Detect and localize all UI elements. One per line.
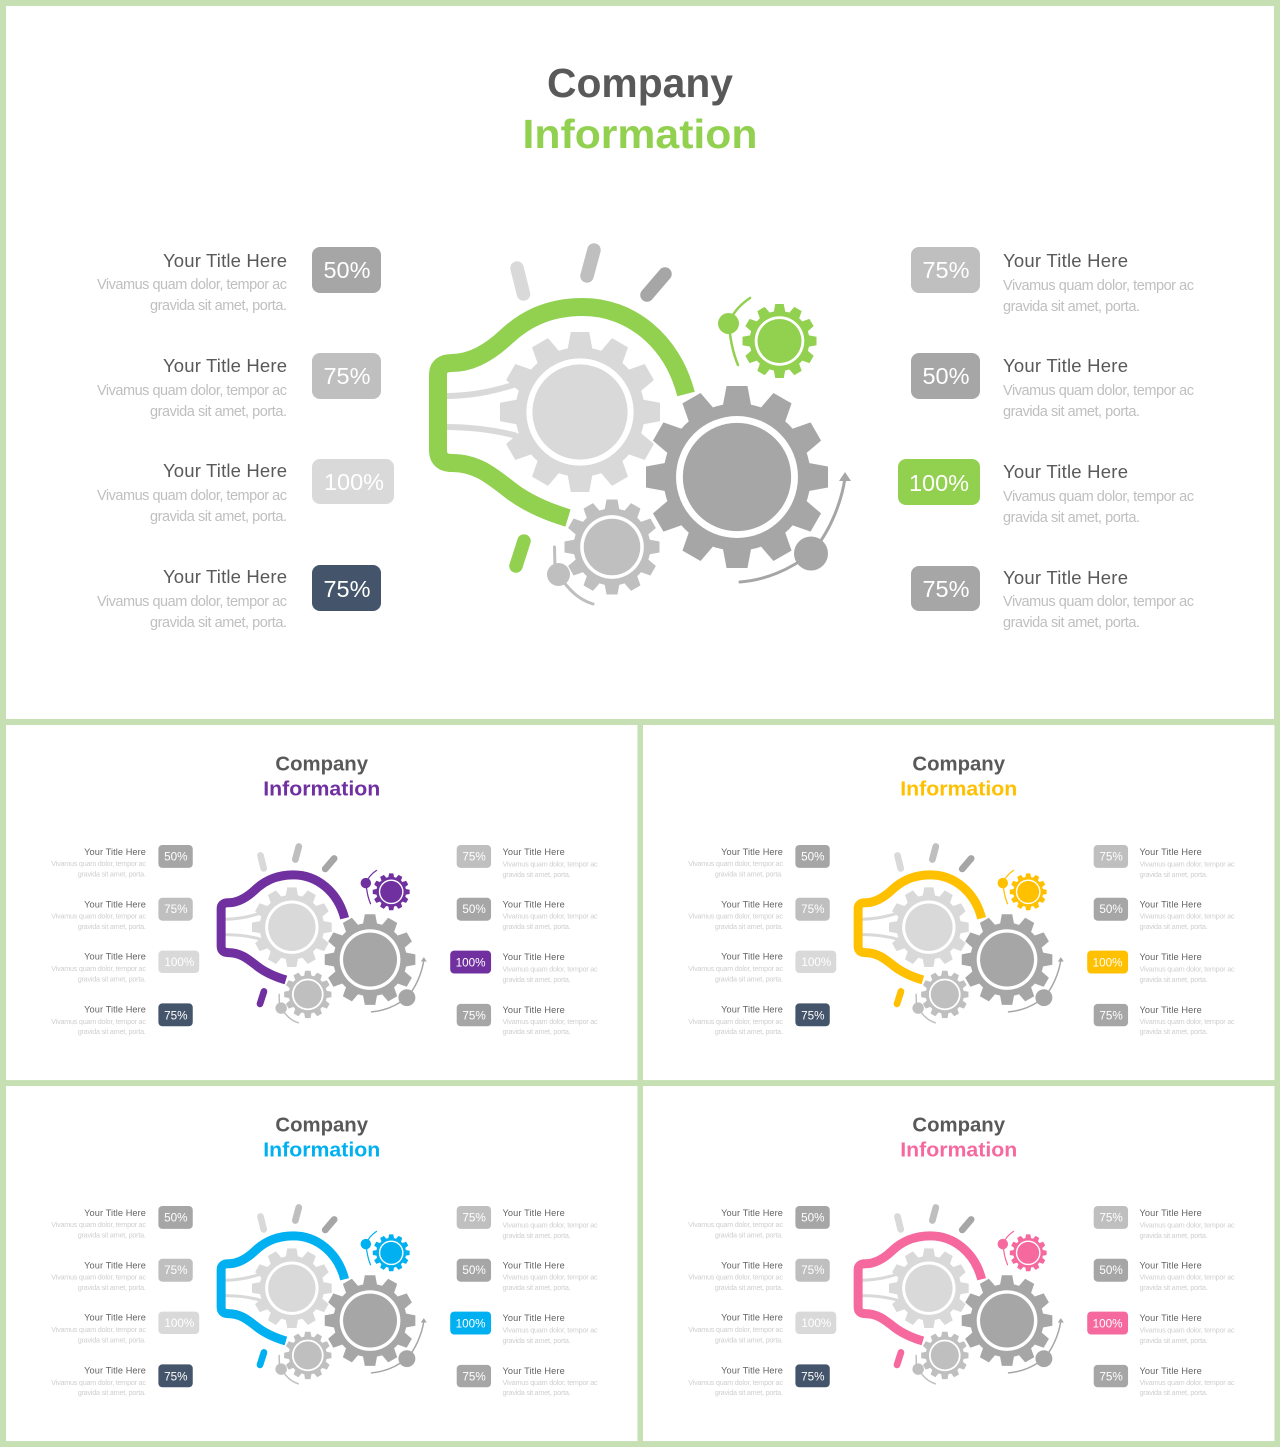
right item 3: 100% [1093, 1318, 1123, 1331]
right item 4: Vivamus quam dolor, tempor ac [503, 1017, 598, 1026]
right item 3: Your Title Here [1140, 952, 1202, 962]
left item 3: gravida sit amet, porta. [78, 1335, 146, 1344]
right item 4: gravida sit amet, porta. [1140, 1388, 1208, 1397]
icon: bulb outline [438, 307, 686, 518]
icon: accent knob [718, 298, 750, 365]
left item 4: gravida sit amet, porta. [78, 1388, 146, 1397]
left item 2: gravida sit amet, porta. [78, 1283, 146, 1292]
right item 3 [450, 1312, 598, 1345]
left item 2: Your Title Here [84, 1260, 146, 1270]
left item 3: Vivamus quam dolor, tempor ac [51, 964, 146, 973]
left item 4 [97, 565, 381, 631]
right item 3: 100% [456, 1318, 486, 1331]
right item 2: Your Title Here [1140, 899, 1202, 909]
right item 1: Vivamus quam dolor, tempor ac [503, 1220, 598, 1229]
left item 1 [51, 1206, 193, 1239]
icon: accent gear [1010, 1234, 1047, 1271]
icon: large gear [962, 914, 1052, 1005]
left item 3: Your Title Here [163, 460, 287, 481]
left item 4: Your Title Here [84, 1365, 146, 1375]
right item 1: gravida sit amet, porta. [503, 1231, 571, 1240]
left item 1: Vivamus quam dolor, tempor ac [51, 1220, 146, 1229]
icon: gray arrow with knob [372, 957, 427, 1012]
right item 2 [1094, 898, 1235, 931]
left item 3: gravida sit amet, porta. [78, 974, 146, 983]
right item 2: gravida sit amet, porta. [1003, 404, 1140, 420]
left item 2: Vivamus quam dolor, tempor ac [688, 912, 783, 921]
title: Information [263, 779, 380, 801]
icon: filament lines [862, 1274, 897, 1300]
right item 1 [1094, 845, 1235, 879]
right item 3: Your Title Here [503, 1313, 565, 1323]
icon: small gear [284, 1332, 331, 1379]
left item 4: Vivamus quam dolor, tempor ac [688, 1017, 783, 1026]
left item 1: Your Title Here [721, 847, 783, 857]
icon: accent gear [373, 1234, 410, 1271]
left item 4: gravida sit amet, porta. [150, 615, 287, 631]
icon: small gear [564, 500, 660, 594]
left item 3 [97, 459, 394, 525]
left item 3: Your Title Here [721, 952, 783, 962]
right item 3: 100% [1093, 957, 1123, 970]
left item 3: gravida sit amet, porta. [715, 974, 783, 983]
right item 1: Vivamus quam dolor, tempor ac [1003, 278, 1194, 294]
left item 4: Your Title Here [163, 566, 287, 587]
icon: rays [897, 847, 971, 1004]
right item 3: Your Title Here [503, 952, 565, 962]
left item 4 [51, 1003, 193, 1036]
panel: main green slide [6, 6, 1274, 719]
right item 3: gravida sit amet, porta. [1140, 1336, 1208, 1345]
right item 1 [1094, 1206, 1235, 1240]
right item 2: 50% [1099, 1264, 1123, 1277]
icon: bulb outline [221, 1236, 345, 1341]
right item 3 [1087, 951, 1235, 984]
right item 1 [911, 247, 1194, 315]
icon: filament lines [225, 1274, 260, 1300]
icon: gray arrow with knob [372, 1318, 427, 1373]
left item 1: 50% [323, 257, 371, 283]
right item 1: 75% [1099, 1211, 1123, 1224]
left item 3: 100% [164, 956, 194, 969]
left item 3: 100% [801, 956, 831, 969]
left item 1: Your Title Here [84, 1208, 146, 1218]
right item 2: Your Title Here [503, 899, 565, 909]
icon: accent knob [998, 870, 1014, 904]
left item 2: 75% [164, 1264, 188, 1277]
title: Company [912, 753, 1006, 775]
right item 3: Your Title Here [1140, 1313, 1202, 1323]
right item 3: Your Title Here [1003, 461, 1128, 482]
title [900, 1114, 1017, 1162]
right item 2: gravida sit amet, porta. [1140, 1283, 1208, 1292]
icon: rays [516, 250, 665, 566]
icon: filament lines [862, 913, 897, 939]
right item 4: gravida sit amet, porta. [503, 1027, 571, 1036]
icon: filament lines [445, 384, 517, 436]
left item 3: 100% [324, 469, 384, 495]
right item 3: 100% [456, 957, 486, 970]
right item 3: Vivamus quam dolor, tempor ac [1140, 965, 1235, 974]
left item 3: Vivamus quam dolor, tempor ac [97, 488, 287, 504]
left item 4 [688, 1364, 830, 1397]
icon: light gear [889, 1248, 969, 1328]
title: Company [547, 60, 733, 106]
right item 4: Vivamus quam dolor, tempor ac [1140, 1378, 1235, 1387]
icon: bulb outline [858, 875, 982, 980]
right item 2: Your Title Here [1140, 1260, 1202, 1270]
right item 1: 75% [462, 850, 486, 863]
left item 1: gravida sit amet, porta. [78, 869, 146, 878]
icon: filament lines [225, 913, 260, 939]
left item 2 [97, 353, 381, 420]
right item 4: Your Title Here [1140, 1366, 1202, 1376]
left item 4: Vivamus quam dolor, tempor ac [51, 1017, 146, 1026]
icon: small knob [912, 994, 935, 1023]
left item 2: 75% [323, 363, 371, 389]
right item 4: gravida sit amet, porta. [503, 1388, 571, 1397]
left item 2 [688, 898, 830, 931]
left item 2: Your Title Here [721, 899, 783, 909]
light bulb with gears illustration [438, 250, 851, 604]
left item 1: Your Title Here [721, 1208, 783, 1218]
icon: small knob [275, 994, 298, 1023]
right item 4: gravida sit amet, porta. [1003, 615, 1140, 631]
icon: gray arrow with knob [1009, 1318, 1064, 1373]
left item 4: 75% [164, 1370, 188, 1383]
right item 2: Your Title Here [503, 1260, 565, 1270]
icon: accent knob [361, 870, 377, 904]
left item 3 [51, 1312, 199, 1344]
right item 1: Your Title Here [1140, 847, 1202, 857]
title: Information [900, 1140, 1017, 1162]
left item 1: 50% [801, 1211, 825, 1224]
left item 2 [51, 1259, 193, 1292]
icon: large gear [962, 1275, 1052, 1366]
right item 1: 75% [1099, 850, 1123, 863]
light bulb with gears illustration [221, 847, 427, 1023]
left item 1 [97, 247, 381, 314]
right item 2: gravida sit amet, porta. [1140, 922, 1208, 931]
left item 3: 100% [801, 1317, 831, 1330]
icon: large gear [325, 914, 415, 1005]
icon: small knob [275, 1355, 298, 1384]
panel: pink slide [643, 1086, 1274, 1441]
left item 1: Your Title Here [163, 250, 287, 271]
icon: small gear [284, 971, 331, 1018]
right item 3: gravida sit amet, porta. [503, 975, 571, 984]
left item 1: gravida sit amet, porta. [78, 1230, 146, 1239]
left item 4: 75% [801, 1370, 825, 1383]
right item 1: Your Title Here [503, 1208, 565, 1218]
icon: large gear [325, 1275, 415, 1366]
icon: accent gear [742, 304, 816, 378]
right item 1: gravida sit amet, porta. [503, 870, 571, 879]
right item 4: 75% [922, 576, 970, 602]
icon: rays [260, 847, 334, 1004]
icon: large gear [646, 386, 828, 568]
left item 2: Vivamus quam dolor, tempor ac [51, 1273, 146, 1282]
left item 4 [688, 1003, 830, 1036]
right item 1: Vivamus quam dolor, tempor ac [1140, 1220, 1235, 1229]
right item 3: gravida sit amet, porta. [1003, 510, 1140, 526]
icon: rays [260, 1208, 334, 1365]
icon: light gear [252, 1248, 332, 1328]
left item 3: Vivamus quam dolor, tempor ac [51, 1325, 146, 1334]
left item 2: gravida sit amet, porta. [715, 922, 783, 931]
left item 2: Vivamus quam dolor, tempor ac [97, 383, 287, 399]
icon: bulb outline [858, 1236, 982, 1341]
left item 4: gravida sit amet, porta. [715, 1027, 783, 1036]
left item 2: 75% [164, 903, 188, 916]
left item 1: gravida sit amet, porta. [715, 1230, 783, 1239]
left item 4: Vivamus quam dolor, tempor ac [51, 1378, 146, 1387]
left item 1: Vivamus quam dolor, tempor ac [97, 277, 287, 293]
right item 2: Vivamus quam dolor, tempor ac [1140, 1273, 1235, 1282]
right item 2: 50% [462, 1264, 486, 1277]
left item 4: 75% [801, 1009, 825, 1022]
right item 4: 75% [1099, 1009, 1123, 1022]
left item 4: Vivamus quam dolor, tempor ac [97, 594, 287, 610]
panel: blue slide [6, 1086, 637, 1441]
left item 4: gravida sit amet, porta. [78, 1027, 146, 1036]
left item 3: gravida sit amet, porta. [715, 1335, 783, 1344]
title: Company [275, 753, 369, 775]
right item 4: Your Title Here [503, 1366, 565, 1376]
icon: accent gear [373, 873, 410, 910]
title [522, 60, 758, 157]
left item 4: 75% [164, 1009, 188, 1022]
left item 1: Vivamus quam dolor, tempor ac [688, 1220, 783, 1229]
right item 3 [1087, 1312, 1235, 1345]
icon: gray arrow with knob [740, 472, 851, 582]
icon: accent gear [1010, 873, 1047, 910]
icon: small knob [912, 1355, 935, 1384]
icon: bulb outline [221, 875, 345, 980]
icon: accent knob [998, 1231, 1014, 1265]
title: Information [522, 111, 758, 157]
panel: yellow slide [643, 725, 1274, 1080]
right item 2: Vivamus quam dolor, tempor ac [503, 912, 598, 921]
icon: small knob [547, 547, 593, 604]
right item 1: gravida sit amet, porta. [1140, 870, 1208, 879]
right item 1: Your Title Here [1003, 250, 1128, 271]
left item 3: 100% [164, 1317, 194, 1330]
right item 2 [911, 353, 1194, 420]
left item 4: Vivamus quam dolor, tempor ac [688, 1378, 783, 1387]
title: Information [263, 1140, 380, 1162]
right item 3: Vivamus quam dolor, tempor ac [1140, 1326, 1235, 1335]
left item 3: Your Title Here [721, 1313, 783, 1323]
left item 1: 50% [164, 850, 188, 863]
icon: small gear [921, 1332, 968, 1379]
left item 3: Vivamus quam dolor, tempor ac [688, 1325, 783, 1334]
left item 4 [51, 1364, 193, 1397]
left item 1: Vivamus quam dolor, tempor ac [51, 859, 146, 868]
left item 1 [688, 845, 830, 878]
left item 2: 75% [801, 903, 825, 916]
right item 2: gravida sit amet, porta. [503, 922, 571, 931]
left item 2: gravida sit amet, porta. [715, 1283, 783, 1292]
right item 4: Your Title Here [503, 1005, 565, 1015]
right item 1: 75% [462, 1211, 486, 1224]
left item 1: 50% [801, 850, 825, 863]
icon: light gear [500, 332, 660, 492]
right item 3 [450, 951, 598, 984]
right item 3: Vivamus quam dolor, tempor ac [503, 1326, 598, 1335]
right item 2: Your Title Here [1003, 355, 1128, 376]
icon: light gear [252, 887, 332, 967]
right item 1: gravida sit amet, porta. [1003, 299, 1140, 315]
left item 1: 50% [164, 1211, 188, 1224]
title: Company [912, 1114, 1006, 1136]
title [900, 753, 1017, 801]
left item 2: Your Title Here [84, 899, 146, 909]
icon: accent knob [361, 1231, 377, 1265]
right item 2 [457, 1259, 598, 1292]
left item 2 [51, 898, 193, 931]
left item 2: Vivamus quam dolor, tempor ac [688, 1273, 783, 1282]
right item 3 [898, 459, 1194, 526]
right item 3: Vivamus quam dolor, tempor ac [503, 965, 598, 974]
light bulb with gears illustration [858, 847, 1064, 1023]
left item 3: Vivamus quam dolor, tempor ac [688, 964, 783, 973]
light bulb with gears illustration [221, 1208, 427, 1384]
title [263, 753, 380, 801]
left item 2 [688, 1259, 830, 1292]
right item 4: Vivamus quam dolor, tempor ac [1140, 1017, 1235, 1026]
left item 1 [688, 1206, 830, 1239]
right item 4 [1094, 1365, 1235, 1397]
right item 2: 50% [922, 363, 970, 389]
right item 1 [457, 1206, 598, 1240]
left item 1: gravida sit amet, porta. [715, 869, 783, 878]
right item 3: gravida sit amet, porta. [503, 1336, 571, 1345]
right item 1: Your Title Here [1140, 1208, 1202, 1218]
left item 3: gravida sit amet, porta. [150, 509, 287, 525]
left item 1: Your Title Here [84, 847, 146, 857]
right item 3: gravida sit amet, porta. [1140, 975, 1208, 984]
right item 4 [1094, 1004, 1235, 1036]
right item 1: 75% [922, 257, 970, 283]
left item 2: gravida sit amet, porta. [150, 404, 287, 420]
right item 4 [911, 566, 1194, 631]
light bulb with gears illustration [858, 1208, 1064, 1384]
icon: small gear [921, 971, 968, 1018]
right item 2: Vivamus quam dolor, tempor ac [1140, 912, 1235, 921]
right item 3: Vivamus quam dolor, tempor ac [1003, 489, 1194, 505]
left item 4: Your Title Here [721, 1365, 783, 1375]
icon: light gear [889, 887, 969, 967]
right item 1: Vivamus quam dolor, tempor ac [1140, 859, 1235, 868]
left item 2: Your Title Here [163, 355, 287, 376]
right item 1: gravida sit amet, porta. [1140, 1231, 1208, 1240]
right item 1: Vivamus quam dolor, tempor ac [503, 859, 598, 868]
left item 3: Your Title Here [84, 1313, 146, 1323]
right item 4: 75% [1099, 1370, 1123, 1383]
left item 1 [51, 845, 193, 878]
left item 4: 75% [323, 576, 371, 602]
right item 4: Your Title Here [1140, 1005, 1202, 1015]
icon: rays [897, 1208, 971, 1365]
title: Company [275, 1114, 369, 1136]
right item 2 [1094, 1259, 1235, 1292]
right item 2: gravida sit amet, porta. [503, 1283, 571, 1292]
left item 3: Your Title Here [84, 952, 146, 962]
right item 4: Your Title Here [1003, 567, 1128, 588]
right item 4: 75% [462, 1009, 486, 1022]
title: Information [900, 779, 1017, 801]
right item 4: gravida sit amet, porta. [1140, 1027, 1208, 1036]
left item 2: 75% [801, 1264, 825, 1277]
left item 3 [688, 951, 836, 983]
right item 4: 75% [462, 1370, 486, 1383]
panel: purple slide [6, 725, 637, 1080]
right item 4: Vivamus quam dolor, tempor ac [1003, 594, 1194, 610]
right item 2: 50% [1099, 903, 1123, 916]
left item 4: Your Title Here [84, 1004, 146, 1014]
right item 4: Vivamus quam dolor, tempor ac [503, 1378, 598, 1387]
left item 3 [51, 951, 199, 983]
left item 1: gravida sit amet, porta. [150, 298, 287, 314]
left item 4: Your Title Here [721, 1004, 783, 1014]
left item 2: Vivamus quam dolor, tempor ac [51, 912, 146, 921]
left item 2: Your Title Here [721, 1260, 783, 1270]
right item 2: Vivamus quam dolor, tempor ac [503, 1273, 598, 1282]
right item 1: Your Title Here [503, 847, 565, 857]
right item 2 [457, 898, 598, 931]
left item 2: gravida sit amet, porta. [78, 922, 146, 931]
right item 2: 50% [462, 903, 486, 916]
right item 4 [457, 1004, 598, 1036]
right item 1 [457, 845, 598, 879]
right item 2: Vivamus quam dolor, tempor ac [1003, 383, 1194, 399]
left item 4: gravida sit amet, porta. [715, 1388, 783, 1397]
right item 3: 100% [909, 470, 969, 496]
left item 3 [688, 1312, 836, 1344]
icon: gray arrow with knob [1009, 957, 1064, 1012]
left item 1: Vivamus quam dolor, tempor ac [688, 859, 783, 868]
right item 4 [457, 1365, 598, 1397]
title [263, 1114, 380, 1162]
